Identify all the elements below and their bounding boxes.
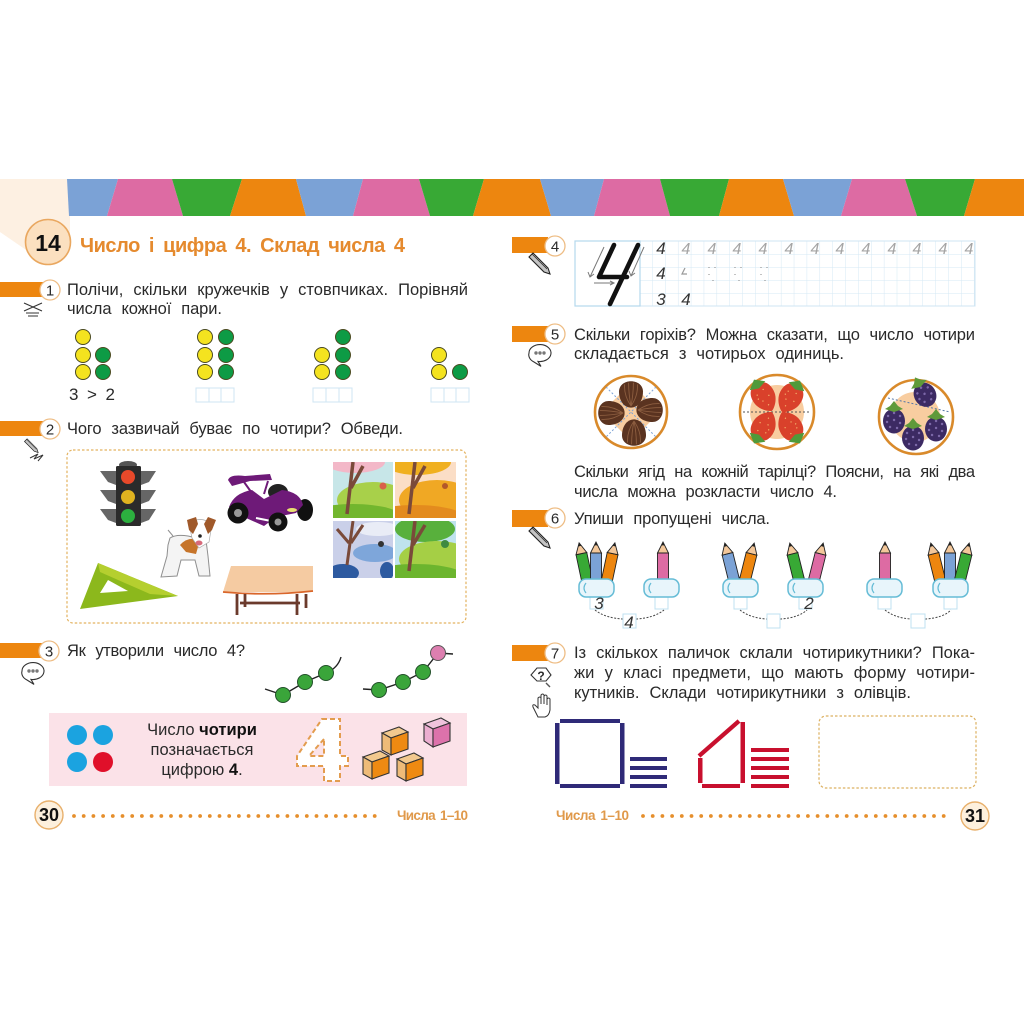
task 5 text: Скільки горіхів? Можна сказати, що число чотири xyxy=(574,326,975,344)
task 2 marker: 2 xyxy=(46,422,54,438)
task 1 text xyxy=(67,281,468,318)
task 7 text: кутників. Склади чотирикутники з олівців. xyxy=(574,684,911,702)
icon: pencil xyxy=(529,253,550,274)
task 3 xyxy=(0,641,453,702)
practice digits: 4 xyxy=(682,241,691,258)
blue stick square xyxy=(555,719,624,788)
task 3 marker: 3 xyxy=(45,644,53,660)
set square ruler xyxy=(80,563,178,609)
task 2 xyxy=(0,419,475,623)
footer left xyxy=(35,801,468,829)
task 4 marker xyxy=(512,236,565,256)
practice digits: 4 xyxy=(811,241,820,258)
task 7 marker: 7 xyxy=(551,646,559,662)
three beads xyxy=(265,657,341,702)
blue stick tally xyxy=(630,757,667,788)
task 5 second text: Скільки ягід на кожній тарілці? Поясни, на які два xyxy=(574,463,976,481)
colour banner right xyxy=(512,179,1024,216)
circle columns xyxy=(76,330,468,380)
plate of strawberries xyxy=(740,374,814,449)
rule text: цифрою 4. xyxy=(161,761,243,779)
traffic light xyxy=(100,461,156,526)
icon: speech bubble xyxy=(22,663,44,684)
colour banner left xyxy=(67,179,512,216)
task 1 marker xyxy=(0,280,60,300)
practice digits: 4 xyxy=(681,290,691,309)
answer boxes xyxy=(196,388,469,402)
practice digits: 4 xyxy=(888,241,897,258)
task 5 xyxy=(512,324,976,501)
task 6 marker: 6 xyxy=(551,510,559,528)
table xyxy=(223,566,313,615)
task 7 marker xyxy=(512,643,565,663)
practice digits: 4 xyxy=(656,239,666,258)
icon: question bubble: ? xyxy=(537,669,545,683)
dashed picture frame xyxy=(67,450,466,623)
rule text xyxy=(147,721,257,779)
lesson number badge xyxy=(26,220,70,264)
summer tile xyxy=(395,521,456,578)
task 5 second text xyxy=(574,463,976,501)
lesson number badge: 14 xyxy=(35,230,61,256)
practice digits: 4 xyxy=(759,241,768,258)
task 4 xyxy=(512,236,975,309)
red stick quadrilateral xyxy=(698,721,745,788)
icon: hand xyxy=(533,694,550,717)
task 3 text: Як утворили число 4? xyxy=(67,642,245,660)
icon: question bubble xyxy=(531,668,551,687)
four beads xyxy=(363,646,453,698)
practice digits: 4 xyxy=(656,264,666,283)
pencils and number bonds 3 xyxy=(867,542,975,628)
seasons landscape tiles xyxy=(303,449,475,590)
plate of nuts xyxy=(595,376,667,448)
title: Число і цифра 4. Склад числа 4 xyxy=(80,235,406,257)
red stick tally xyxy=(751,748,789,788)
cubes xyxy=(363,718,450,781)
practice digits: 4 xyxy=(836,241,845,258)
footer right xyxy=(556,802,989,830)
winter tile xyxy=(333,521,393,578)
digit stroke demonstration xyxy=(588,245,644,304)
task 7 text: Із скількох паличок склали чотирикутники? Пока- xyxy=(574,644,975,662)
task 2 text: Чого зазвичай буває по чотири? Обведи. xyxy=(67,420,403,438)
task 1 marker: 1 xyxy=(46,282,54,300)
task 5 second text: числа можна розкласти число 4. xyxy=(574,483,837,501)
right page xyxy=(512,179,1024,830)
pencils and number bonds 1 xyxy=(574,542,679,632)
left page xyxy=(0,179,512,829)
spring tile xyxy=(333,462,393,518)
big digit 4 xyxy=(297,719,348,781)
practice digits xyxy=(656,239,974,309)
task 7 text xyxy=(574,644,975,702)
icon: speech bubble xyxy=(529,345,551,366)
autumn tile xyxy=(395,462,456,518)
pencils and number bonds 2: 2 xyxy=(803,594,814,613)
pencils and number bonds 1: 3 xyxy=(594,594,604,613)
task 6 marker xyxy=(512,508,565,528)
practice digits: 4 xyxy=(913,241,922,258)
writing grid xyxy=(575,241,975,306)
footer left: 30 xyxy=(39,805,59,825)
task 6 text: Упиши пропущені числа. xyxy=(574,510,770,528)
task 3 marker xyxy=(0,641,59,661)
footer right: Числа 1–10 xyxy=(556,808,629,823)
rule text: Число чотири xyxy=(147,721,257,739)
toy car xyxy=(228,474,313,532)
task 5 marker xyxy=(512,324,565,344)
icon: pencil scribble xyxy=(24,439,43,461)
practice digits: 4 xyxy=(965,241,974,258)
task 1 text: Полічи, скільки кружечків у стовпчиках. Порівняй xyxy=(67,281,468,299)
practice digits: 4 xyxy=(733,241,742,258)
practice digits: 4 xyxy=(785,241,794,258)
footer left: Числа 1–10 xyxy=(397,808,468,823)
rule text: позначається xyxy=(151,741,253,759)
icon: compare signs xyxy=(24,303,42,316)
task 7 xyxy=(512,643,976,788)
task 1 text: числа кожної пари. xyxy=(67,300,222,318)
rule panel xyxy=(49,713,467,786)
task 5 marker: 5 xyxy=(551,326,559,344)
example comparison: 3 > 2 xyxy=(69,385,115,404)
dashed answer box xyxy=(819,716,976,788)
task 2 marker xyxy=(0,419,60,439)
dog xyxy=(161,517,216,577)
practice digits: 3 xyxy=(656,290,666,309)
footer right: 31 xyxy=(965,806,985,826)
task 1 xyxy=(0,280,469,404)
icon: pencil xyxy=(529,527,550,548)
pencils and number bonds 2 xyxy=(719,542,829,628)
pencils and number bonds 1: 4 xyxy=(624,613,634,632)
practice digits: 4 xyxy=(939,241,948,258)
task 5 text: складається з чотирьох одиниць. xyxy=(574,345,844,363)
task 6 xyxy=(512,508,975,632)
plate of blackberries xyxy=(879,372,953,454)
task 4 marker: 4 xyxy=(551,238,559,256)
cream corner xyxy=(0,179,70,265)
task 7 text: жи у класі предмети, що мають форму чотири- xyxy=(574,664,975,682)
four dots xyxy=(67,725,113,772)
practice digits: 4 xyxy=(862,241,871,258)
practice digits: 4 xyxy=(708,241,717,258)
task 5 text xyxy=(574,326,975,363)
